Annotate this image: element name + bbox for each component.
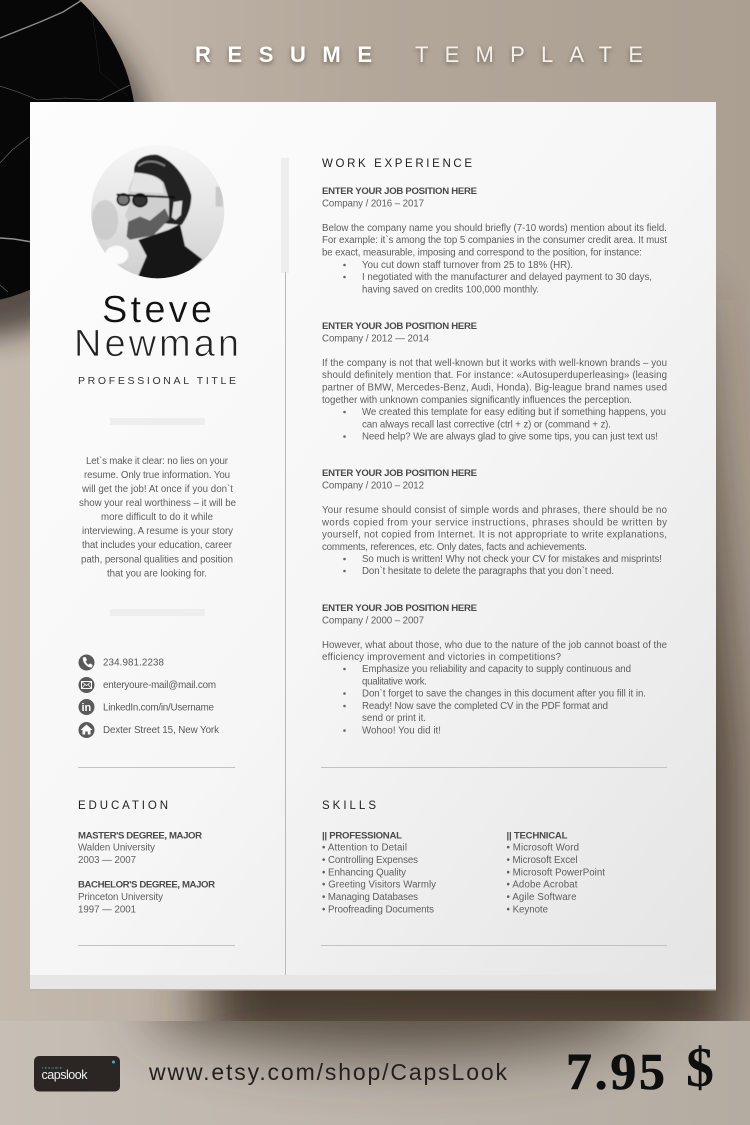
job 4: Wohoo! You did it! xyxy=(362,726,441,736)
job 3: comments, references, etc. Only dates, facts and achievements. xyxy=(322,542,587,553)
intro text: will get the job! At once if you don`t xyxy=(81,484,233,495)
professional skills: • Controlling Expenses xyxy=(322,855,418,866)
technical skills: || TECHNICAL xyxy=(506,830,568,842)
icon: phone xyxy=(78,654,94,670)
intro text: Let`s make it clear: no lies on your xyxy=(86,456,229,467)
job 4: efficiency improvement and victories in competitions? xyxy=(322,652,562,663)
skills heading: SKILLS xyxy=(322,800,376,812)
phone number: 234.981.2238 xyxy=(103,658,165,668)
job 2: We created this template for easy editing but if something happens, you xyxy=(362,407,666,418)
linkedin url: LinkedIn.com/in/Username xyxy=(103,702,215,714)
capslook logo xyxy=(34,1056,120,1092)
education heading: EDUCATION xyxy=(78,800,168,812)
address: Dexter Street 15, New York xyxy=(103,725,219,736)
job 4 xyxy=(322,603,667,736)
professional title: PROFESSIONAL TITLE xyxy=(78,375,236,387)
icon: linkedin: in xyxy=(82,702,92,714)
technical skills: • Adobe Acrobat xyxy=(506,880,578,890)
job 3: yourself, not copied from Internet. It is not appropriate to write explanations, xyxy=(322,530,667,540)
price: $ xyxy=(686,1037,714,1099)
icon: envelope xyxy=(78,677,94,693)
last name: Newman xyxy=(74,323,239,365)
ear xyxy=(172,201,182,220)
job 3: words copied from your service instructions, phrases should be written by xyxy=(321,518,667,528)
intro text xyxy=(79,456,236,580)
job 1 xyxy=(322,186,667,296)
education: MASTER'S DEGREE, MAJOR xyxy=(78,830,202,842)
job 4: Don`t forget to save the changes in this document after you fill it in. xyxy=(362,688,646,700)
job 1: Company / 2016 – 2017 xyxy=(322,198,424,210)
education: Walden University xyxy=(78,842,155,854)
email: enteryoure-mail@mail.com xyxy=(103,680,216,691)
technical skills: • Keynote xyxy=(506,904,548,916)
job 1: ENTER YOUR JOB POSITION HERE xyxy=(322,186,478,197)
icon: linkedin xyxy=(78,699,94,715)
job 1: I negotiated with the manufacturer and delayed payment to 30 days, xyxy=(362,272,652,283)
job 4: Company / 2000 – 2007 xyxy=(322,616,424,626)
job 3: ENTER YOUR JOB POSITION HERE xyxy=(322,468,478,479)
job 3: Don`t hesitate to delete the paragraphs that you don`t need. xyxy=(362,566,614,577)
capslook logo: capslook xyxy=(42,1068,88,1082)
professional skills: • Greeting Visitors Warmly xyxy=(322,880,436,890)
education xyxy=(78,800,215,916)
price xyxy=(566,1037,714,1101)
intro text: path, personal qualities and position xyxy=(81,554,233,566)
technical skills: • Microsoft PowerPoint xyxy=(506,868,605,878)
job 2: can always recall last corrective (ctrl + z) or (command + z). xyxy=(362,420,611,430)
name xyxy=(74,289,239,365)
intro text: that you are looking for. xyxy=(107,568,207,580)
job 1: You cut down staff turnover from 25 to 18% (HR). xyxy=(362,260,573,271)
job 3: So much is written! Why not check your CV for mistakes and misprints! xyxy=(362,554,662,565)
header title xyxy=(195,42,643,67)
technical skills xyxy=(506,830,605,916)
marble circle xyxy=(0,0,136,304)
technical skills: • Agile Software xyxy=(506,892,576,903)
job 2: Company / 2012 — 2014 xyxy=(322,334,430,344)
contacts xyxy=(78,654,219,738)
capslook logo: resume xyxy=(42,1065,63,1070)
resume paper xyxy=(30,102,716,990)
job 1: For example: it`s among the top 5 companies in the consumer credit area. It must xyxy=(322,235,667,246)
intro text: that includes your education, career xyxy=(82,540,233,551)
beard xyxy=(127,208,170,240)
job 4: ENTER YOUR JOB POSITION HERE xyxy=(322,603,478,614)
technical skills: • Microsoft Excel xyxy=(506,855,578,866)
template word: TEMPLATE xyxy=(415,42,643,67)
work experience heading: WORK EXPERIENCE xyxy=(322,158,472,170)
job 1: Below the company name you should briefly (7-10 words) mention about its field. xyxy=(322,223,667,234)
intro text: interviewing. A resume is your story xyxy=(82,526,233,537)
job 4: qualitative work. xyxy=(362,676,427,688)
job 4: send or print it. xyxy=(362,713,426,724)
education: 2003 — 2007 xyxy=(78,855,136,866)
glasses xyxy=(117,194,129,205)
job 3: Your resume should consist of simple words and phrases, there should be no xyxy=(322,505,667,516)
lower accent bar xyxy=(110,609,205,616)
icon: house xyxy=(78,722,94,738)
intro text: more difficult to do it while xyxy=(101,512,213,523)
job 2: together with unknown companies significantly influences the perception. xyxy=(322,395,632,406)
intro text: resume. Only true information. You xyxy=(84,470,230,481)
job 2: should definitely mention that. For instance: «Autosuperduperleasing» (leasing xyxy=(322,370,667,381)
job 2: ENTER YOUR JOB POSITION HERE xyxy=(322,321,478,332)
professional skills: • Proofreading Documents xyxy=(322,904,434,916)
first name: Steve xyxy=(102,289,212,331)
hair xyxy=(134,155,191,225)
technical skills: • Microsoft Word xyxy=(506,842,579,854)
job 1: be exact, measurable, imposing and correspond to the position, for instance: xyxy=(322,248,642,258)
job 4: Ready! Now save the completed CV in the PDF format and xyxy=(362,701,608,712)
professional skills xyxy=(322,830,436,916)
professional skills: • Managing Databases xyxy=(322,892,418,903)
rule lines xyxy=(78,767,667,946)
job 4: However, what about those, who due to the nature of the job cannot boast of the xyxy=(322,640,667,651)
turtleneck xyxy=(138,224,202,282)
price: 7.95 xyxy=(566,1044,665,1101)
intro text: show your real worthiness – it will be xyxy=(79,498,236,509)
portrait photo xyxy=(91,154,224,278)
job 2: Need help? We are always glad to give some tips, you can just text us! xyxy=(362,432,658,442)
job 3: Company / 2010 – 2012 xyxy=(322,480,424,492)
job 3 xyxy=(321,468,667,577)
education: BACHELOR'S DEGREE, MAJOR xyxy=(78,880,215,890)
professional skills: || PROFESSIONAL xyxy=(322,830,402,842)
face xyxy=(125,172,170,226)
job 2 xyxy=(322,321,667,442)
job 2: If the company is not that well-known but it works with well-known brands – you xyxy=(322,358,667,369)
education: 1997 — 2001 xyxy=(78,904,136,916)
job 2: partner of BMW, Mercedes-Benz, Audi, Honda). Big-league brand names used xyxy=(322,382,667,394)
vertical divider xyxy=(281,158,289,975)
professional skills: • Attention to Detail xyxy=(322,842,407,854)
professional skills: • Enhancing Quality xyxy=(322,868,406,878)
shop url: www.etsy.com/shop/CapsLook xyxy=(148,1059,508,1085)
upper accent bar xyxy=(110,418,205,425)
job 1: having saved on credits 100,000 monthly. xyxy=(362,284,539,296)
resume word: RESUME xyxy=(195,42,372,67)
job 4: Emphasize you reliability and capacity to supply continuous and xyxy=(362,664,631,675)
education: Princeton University xyxy=(78,892,163,903)
